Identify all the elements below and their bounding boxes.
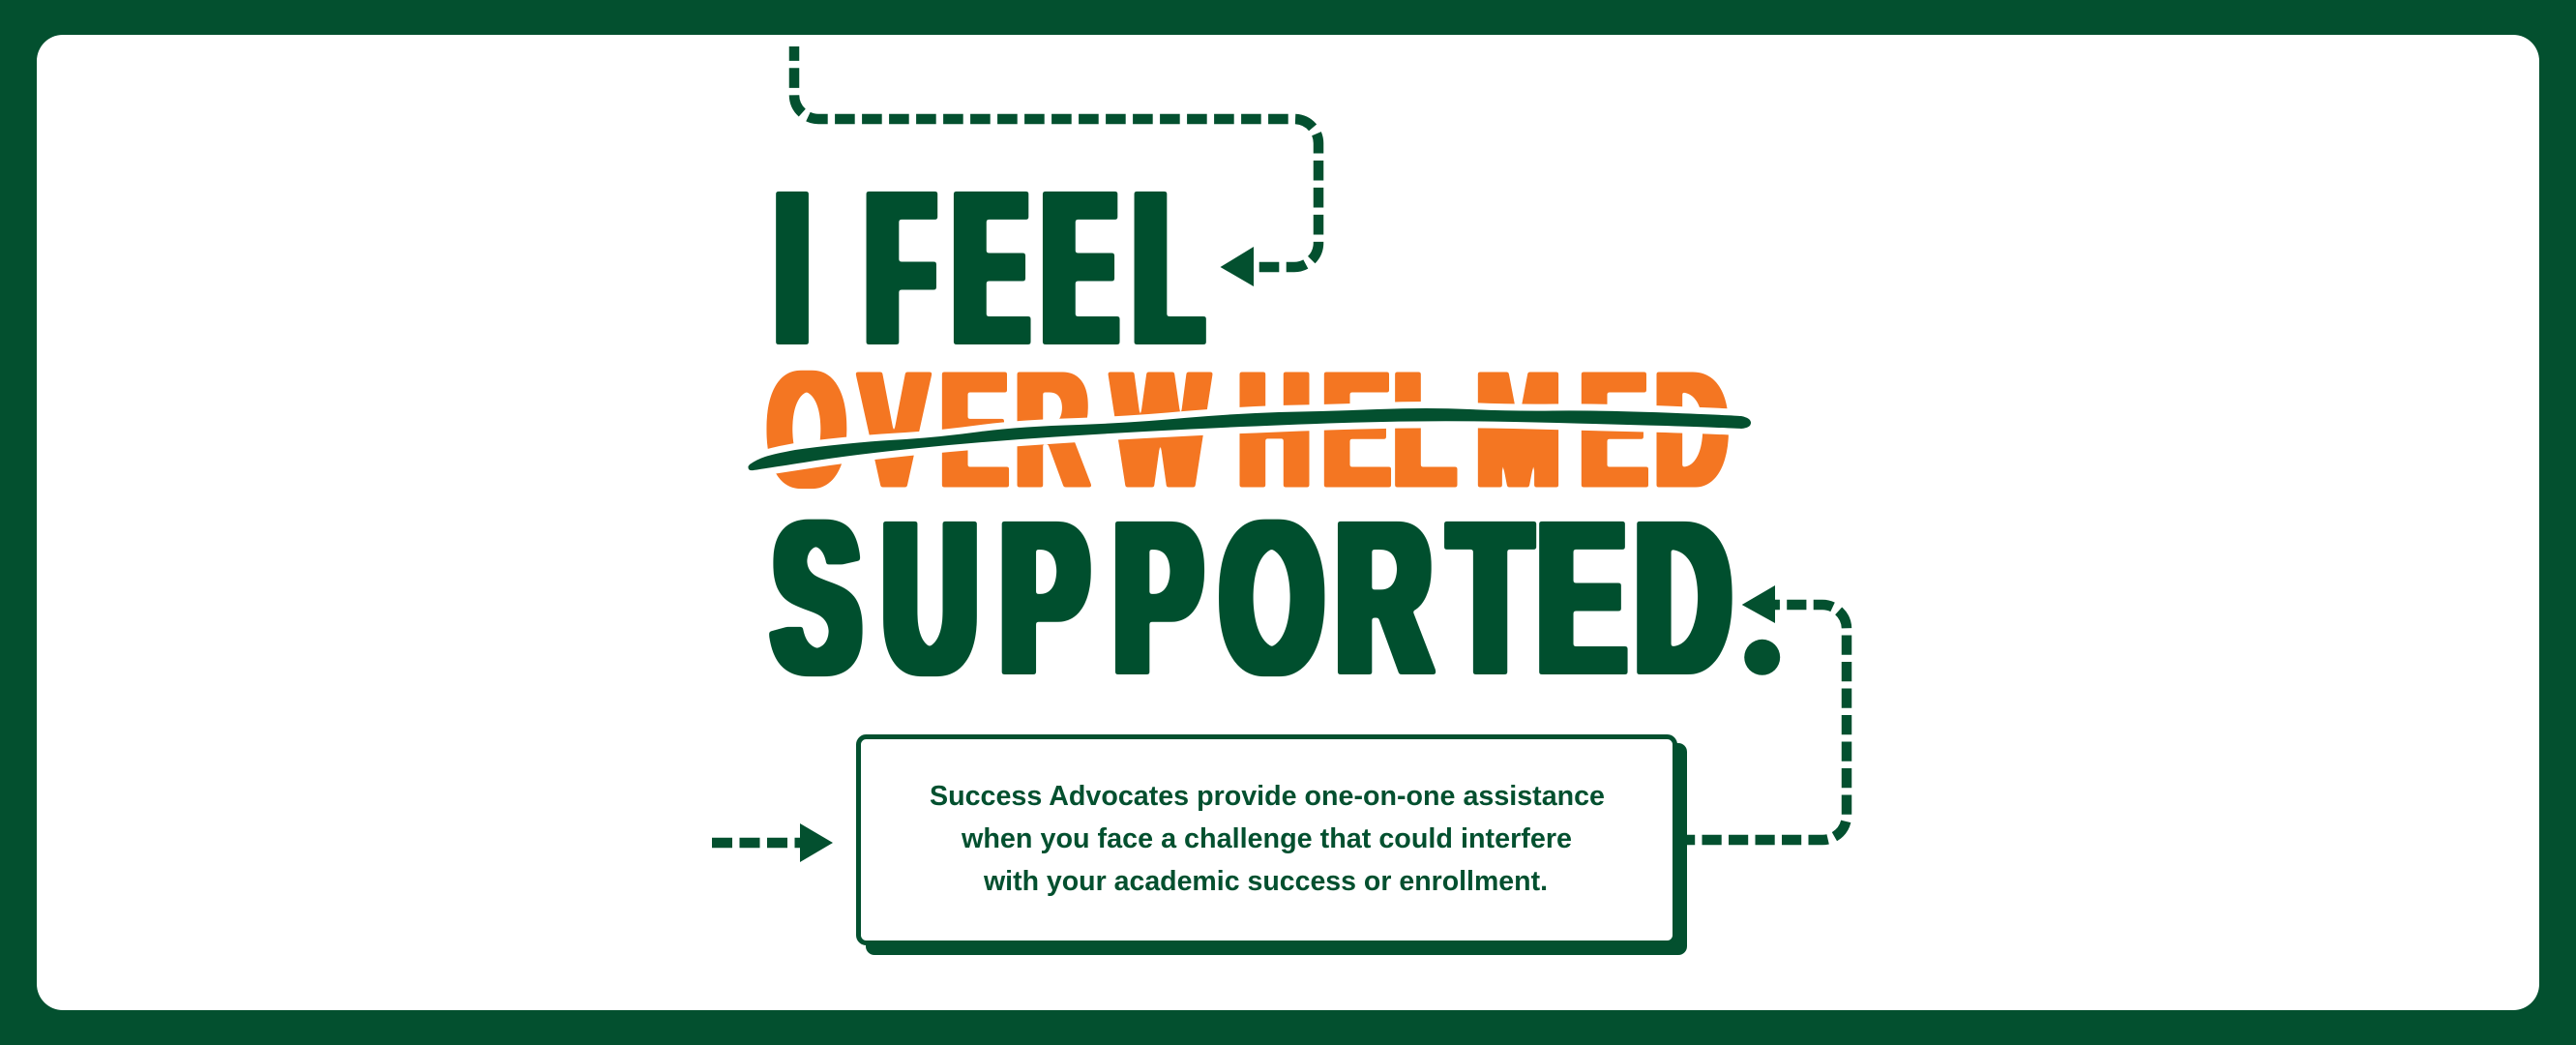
callout box [859, 737, 1687, 955]
description text: Success Advocates provide one-on-one assistance [930, 781, 1605, 812]
heading: I FEEL: I FEEL [778, 147, 1200, 389]
description text [930, 781, 1605, 897]
description text: when you face a challenge that could interfere [961, 823, 1572, 854]
strikethrough brush stroke [748, 408, 1751, 470]
heading: OVERWHELMED crossed out: OVERWHELMED [768, 337, 1727, 522]
arrow: dashed path from box to period [1687, 585, 1847, 840]
arrow: dashed arrow into box [712, 823, 833, 862]
period dot [1744, 640, 1780, 675]
arrow: dashed path into I FEEL [794, 46, 1318, 286]
title [748, 147, 1780, 720]
heading: SUPPORTED: SUPPORTED [773, 478, 1730, 720]
box frame [859, 737, 1675, 942]
description text: with your academic success or enrollment. [983, 866, 1548, 897]
box shadow [866, 743, 1687, 955]
